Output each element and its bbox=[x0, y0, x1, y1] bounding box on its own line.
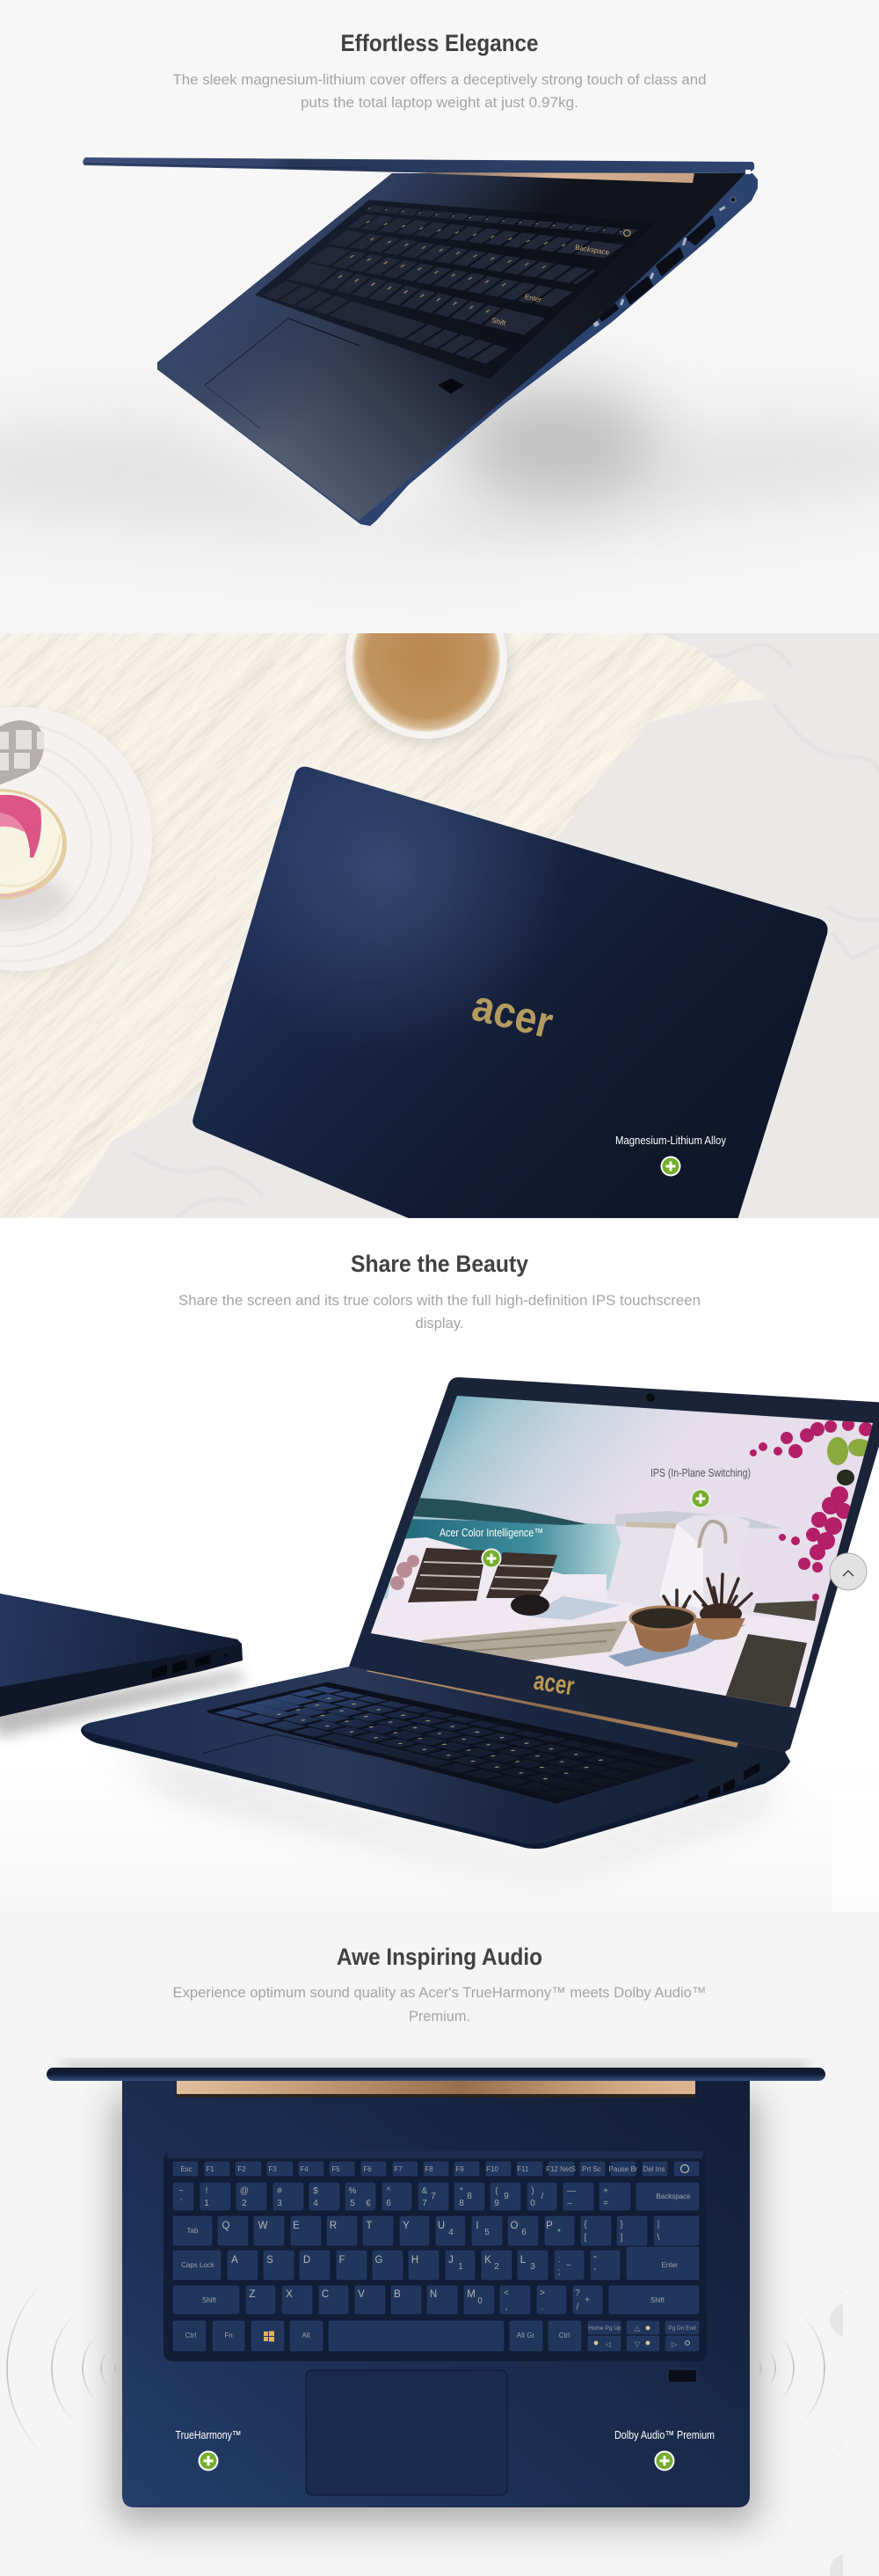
key legends: € bbox=[366, 2199, 371, 2208]
key legends: # bbox=[277, 2186, 282, 2196]
description: cover bbox=[172, 71, 707, 111]
key legends: M bbox=[467, 2289, 476, 2300]
gold hinge strip bbox=[366, 1670, 739, 1748]
scroll-to-top button bbox=[830, 1553, 867, 1590]
laptop: half-open side view bbox=[83, 157, 758, 526]
fingerprint reader bbox=[438, 378, 464, 394]
key legends: ` bbox=[179, 2198, 183, 2208]
description: screen: Share the screen and its true colors with the full high-definition IPS touchscreen bbox=[178, 1292, 701, 1309]
small flowers by chairs bbox=[390, 1555, 419, 1590]
key legends: Caps Lock bbox=[181, 2261, 215, 2269]
description: cover: puts the total laptop weight at just 0.97kg. bbox=[301, 94, 578, 111]
key legends: J bbox=[448, 2255, 454, 2266]
key legends: 7 bbox=[431, 2192, 436, 2201]
laptop floor shadow bbox=[0, 387, 879, 554]
key legends: B bbox=[394, 2289, 401, 2300]
key legends: 9 bbox=[494, 2199, 499, 2208]
key legends: Esc bbox=[180, 2165, 193, 2173]
cupcake bbox=[0, 789, 67, 900]
chairs bbox=[408, 1548, 557, 1602]
keyboard, perspective bbox=[208, 1683, 694, 1802]
key legends: 3 bbox=[530, 2262, 535, 2272]
key legends: R bbox=[330, 2221, 337, 2231]
key legends: ( bbox=[495, 2186, 498, 2196]
description: audio: Experience optimum sound quality as Acer's TrueHarmony™ meets Dolby Audio™ bbox=[172, 1984, 707, 2001]
key legends: F4 bbox=[300, 2165, 309, 2173]
key legends: | bbox=[657, 2220, 659, 2229]
section: photo of lid on marble bbox=[0, 633, 879, 1218]
key legends: F2 bbox=[237, 2165, 246, 2173]
key legends: / bbox=[541, 2192, 544, 2201]
key legends: 5 bbox=[484, 2228, 490, 2237]
fingerprint reader bbox=[668, 2369, 697, 2383]
key legends: $ bbox=[313, 2186, 318, 2196]
key legends: – bbox=[567, 2199, 572, 2208]
key legends: + bbox=[585, 2295, 590, 2305]
key legends: T bbox=[366, 2221, 373, 2231]
key legends: C bbox=[322, 2289, 329, 2300]
key legends: > bbox=[540, 2288, 545, 2298]
key legends: ~ bbox=[178, 2186, 184, 2196]
key legends: F bbox=[338, 2255, 345, 2266]
key legends: — bbox=[567, 2186, 576, 2196]
key legends: 8 bbox=[467, 2192, 472, 2201]
acer logo: acer bbox=[532, 1667, 577, 1701]
key legends: A bbox=[231, 2255, 238, 2266]
heading: Share the Beauty: Share the Beauty bbox=[351, 1251, 528, 1277]
key legends: Del Ins bbox=[643, 2165, 665, 2173]
key legends: ' bbox=[594, 2267, 596, 2277]
laptop shadow bbox=[62, 2062, 809, 2524]
key legends: Home Pg Up bbox=[588, 2325, 621, 2332]
key legends: @ bbox=[240, 2186, 249, 2196]
heading: Awe Inspiring Audio: Awe Inspiring Audio bbox=[337, 1944, 542, 1970]
section: awe inspiring audio bbox=[0, 1912, 879, 2576]
shadow under laptops bbox=[0, 1671, 791, 1873]
laptop side edge with ports bbox=[157, 173, 758, 526]
key legends: N bbox=[430, 2289, 437, 2300]
trackpad bbox=[306, 2370, 507, 2495]
key legends: * bbox=[557, 2228, 561, 2237]
key legends: I bbox=[476, 2221, 479, 2231]
key legends: 0 bbox=[477, 2296, 483, 2306]
key legends: Shift bbox=[202, 2296, 217, 2304]
half buttons at edge bbox=[830, 2303, 863, 2576]
key legends: F3 bbox=[268, 2165, 277, 2173]
key legends: 6 bbox=[521, 2228, 527, 2237]
key legends: H bbox=[411, 2255, 418, 2266]
key legends: } bbox=[620, 2220, 623, 2229]
icon: plus bbox=[661, 1156, 680, 1177]
key legends: ] bbox=[621, 2233, 623, 2243]
key legends: F6 bbox=[363, 2165, 372, 2173]
key legends: 8 bbox=[459, 2199, 464, 2208]
key legends bbox=[278, 1698, 603, 1782]
key legends: 2 bbox=[494, 2262, 499, 2272]
key legends: Ctrl bbox=[559, 2332, 570, 2339]
key legends: F7 bbox=[394, 2165, 403, 2173]
key legends: Prt Sc bbox=[582, 2165, 601, 2173]
plate with cupcake bbox=[0, 707, 152, 974]
key legends: P bbox=[546, 2221, 553, 2231]
key legends: F12 NetS bbox=[546, 2165, 576, 2173]
key legends: Shift bbox=[650, 2296, 665, 2304]
gold hinge bbox=[177, 2077, 695, 2098]
key legends: ▽ bbox=[635, 2340, 641, 2348]
key legends: 7 bbox=[422, 2199, 427, 2208]
key legends: 4 bbox=[313, 2199, 318, 2208]
key legends: Alt Gr bbox=[517, 2332, 535, 2339]
key legends: △ bbox=[635, 2324, 641, 2332]
key legends: Z bbox=[249, 2289, 256, 2300]
key legends: ? bbox=[575, 2288, 580, 2298]
laptop lid edge bbox=[83, 157, 754, 174]
keyboard gold labels: Enter bbox=[524, 293, 542, 304]
key legends: F11 bbox=[517, 2165, 529, 2173]
white block artefact bbox=[832, 1789, 879, 1912]
key legends: < bbox=[504, 2288, 509, 2298]
key legends: 4 bbox=[448, 2228, 454, 2237]
paper wrapper bbox=[0, 720, 44, 784]
key legends: & bbox=[422, 2186, 428, 2196]
key legends: Fn bbox=[224, 2332, 233, 2339]
key legends: , bbox=[505, 2302, 507, 2312]
key legends: ) bbox=[531, 2186, 534, 2196]
description: cover: The sleek magnesium-lithium cover offers a deceptively strong touch of class and bbox=[172, 71, 707, 88]
key legends: D bbox=[303, 2255, 310, 2266]
icon: plus bbox=[199, 2450, 218, 2471]
keyboard gold labels: Shift bbox=[490, 317, 507, 327]
key legends: ! bbox=[206, 2186, 207, 2196]
sound waves: right bbox=[630, 2249, 869, 2488]
key legends: F10 bbox=[486, 2165, 498, 2173]
key legends: % bbox=[349, 2186, 357, 2196]
keyboard gold labels: Backspace bbox=[575, 244, 610, 257]
coffee cup bbox=[339, 633, 513, 748]
key legends: / bbox=[577, 2302, 579, 2312]
description: audio: Premium. bbox=[409, 2008, 470, 2025]
label: Magnesium-Lithium Alloy: Magnesium-Lithium Alloy bbox=[615, 1134, 726, 1147]
icon: plus bbox=[482, 1548, 501, 1569]
port cluster bbox=[684, 1762, 759, 1805]
key legends: F5 bbox=[331, 2165, 340, 2173]
cream fabric bbox=[0, 633, 768, 1218]
webcam bbox=[646, 1393, 655, 1402]
gold hinge bbox=[412, 172, 694, 183]
laptop lid bbox=[193, 767, 828, 1231]
description: screen: display. bbox=[415, 1315, 464, 1332]
key legends: Pg Dn End bbox=[668, 2325, 696, 2332]
key legends: Tab bbox=[187, 2227, 199, 2235]
key legends: E bbox=[293, 2221, 300, 2231]
key legends: ◁ bbox=[606, 2340, 612, 2348]
key legends: [ bbox=[585, 2233, 587, 2243]
acer logo: acer bbox=[468, 981, 558, 1047]
keyboard, perspective bbox=[257, 201, 653, 378]
label: TrueHarmony: TrueHarmony™ bbox=[176, 2428, 241, 2441]
key legends: * bbox=[460, 2186, 463, 2196]
description: audio bbox=[172, 1984, 707, 2025]
bougainvillea bbox=[750, 1419, 873, 1601]
key legends: F8 bbox=[425, 2165, 433, 2173]
key legends: F1 bbox=[206, 2165, 214, 2173]
key legends: : bbox=[558, 2255, 560, 2265]
key legends: + bbox=[603, 2186, 608, 2196]
key legends: – bbox=[566, 2260, 571, 2270]
marble background bbox=[0, 633, 879, 1218]
description: screen bbox=[178, 1292, 701, 1332]
trackpad line bbox=[202, 1734, 381, 1758]
key legends: " bbox=[593, 2255, 597, 2265]
key legends: G bbox=[375, 2255, 383, 2266]
key legends: O bbox=[511, 2221, 519, 2231]
key legends: V bbox=[358, 2289, 365, 2300]
section: effortless elegance bbox=[0, 0, 879, 633]
laptop lid, edge on bbox=[47, 2068, 825, 2081]
keyboard well and keys bbox=[163, 2151, 707, 2361]
keyboard gold labels bbox=[339, 208, 636, 327]
key legends: U bbox=[438, 2221, 445, 2231]
screen photo: terrace and sea bbox=[352, 1390, 879, 1715]
key legends: Y bbox=[403, 2221, 410, 2231]
key legends: 2 bbox=[242, 2199, 247, 2208]
key legends: ▷ bbox=[672, 2340, 678, 2348]
heading: Effortless Elegance: Effortless Elegance bbox=[341, 30, 538, 56]
key legends: { bbox=[584, 2220, 587, 2229]
main laptop base bbox=[81, 1667, 790, 1849]
key legends: L bbox=[520, 2255, 527, 2266]
second laptop, closed bbox=[0, 1594, 243, 1717]
key legends: \ bbox=[657, 2233, 660, 2243]
key legends: X bbox=[286, 2289, 293, 2300]
key legends: 6 bbox=[386, 2199, 391, 2208]
trackpad outline bbox=[205, 318, 360, 428]
laptop base, top view bbox=[122, 2076, 750, 2507]
key legends: = bbox=[603, 2199, 608, 2208]
section: share the beauty bbox=[0, 1218, 879, 1912]
label: Acer Color Intelligence: Acer Color Intelligence™ bbox=[440, 1526, 543, 1539]
label: IPS: IPS (In-Plane Switching) bbox=[650, 1466, 751, 1479]
key legends: Q bbox=[222, 2221, 230, 2231]
label: Dolby Audio Premium: Dolby Audio™ Premium bbox=[614, 2428, 715, 2441]
key legends: Backspace bbox=[656, 2193, 691, 2200]
key legends: Enter bbox=[661, 2261, 679, 2269]
main laptop screen bbox=[349, 1377, 879, 1752]
key legends: K bbox=[484, 2255, 491, 2266]
icon: plus bbox=[691, 1488, 710, 1509]
laptop top surface bbox=[157, 173, 745, 521]
key legends: . bbox=[541, 2302, 543, 2312]
key legends: 3 bbox=[277, 2199, 282, 2208]
key legends: ^ bbox=[387, 2186, 391, 2196]
rock wall bbox=[725, 1634, 807, 1711]
key legends: W bbox=[258, 2221, 268, 2231]
key legends: ; bbox=[558, 2267, 560, 2277]
key legends: 0 bbox=[530, 2199, 535, 2208]
key legends: F9 bbox=[455, 2165, 464, 2173]
sound waves: left bbox=[7, 2249, 246, 2488]
key legends: 9 bbox=[504, 2192, 509, 2201]
key legends: Alt bbox=[301, 2332, 310, 2339]
key legends: Pause Br bbox=[609, 2165, 638, 2173]
key legends: 1 bbox=[204, 2199, 209, 2208]
key legends bbox=[178, 2165, 696, 2348]
key legends: Ctrl bbox=[185, 2332, 196, 2339]
key legends: 5 bbox=[350, 2199, 355, 2208]
pots and plants bbox=[630, 1574, 752, 1653]
key legends: S bbox=[266, 2255, 273, 2266]
icon: plus bbox=[654, 2450, 675, 2471]
key legends: 1 bbox=[458, 2262, 463, 2272]
